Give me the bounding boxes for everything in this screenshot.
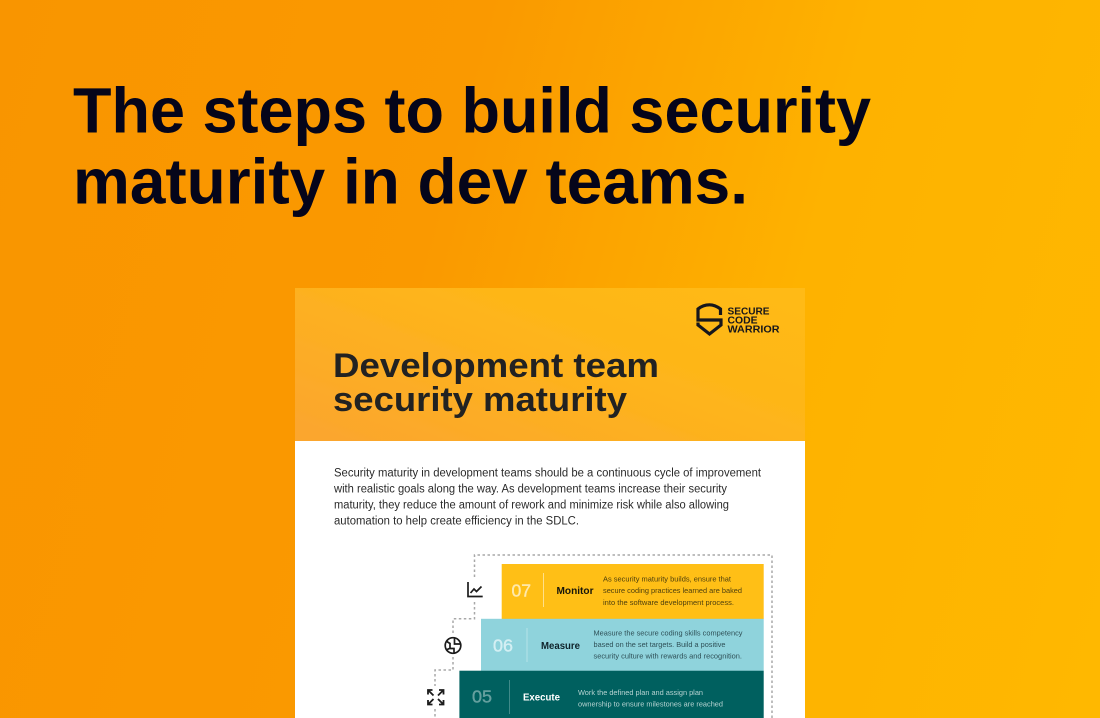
step description Measure xyxy=(594,628,743,660)
step description Execute: ownership to ensure milestones are reached xyxy=(578,700,723,708)
logo: Secure Code Warrior xyxy=(698,305,780,336)
intro paragraph xyxy=(333,468,762,528)
intro paragraph: maturity, they reduce the amount of rework and minimize risk while also allowing xyxy=(334,500,729,512)
step 07: Monitor xyxy=(502,564,764,619)
title: The steps to build security xyxy=(73,74,871,146)
intro paragraph: Security maturity in development teams should be a continuous cycle of improvement xyxy=(334,468,762,480)
step 05: Execute xyxy=(459,671,764,718)
title: maturity in dev teams. xyxy=(73,146,748,218)
step number 07: 07 xyxy=(512,581,531,601)
panel: document preview xyxy=(295,288,805,718)
step name Measure: Measure xyxy=(541,641,580,652)
logo: Secure Code Warrior: SECURE xyxy=(728,306,770,318)
title xyxy=(73,74,871,218)
step name Monitor: Monitor xyxy=(556,586,594,597)
step description Measure: security culture with rewards and recognition. xyxy=(594,652,742,660)
icon: pie chart xyxy=(445,638,461,653)
logo: Secure Code Warrior: CODE xyxy=(728,316,758,326)
step description Monitor: into the software development process. xyxy=(603,598,734,607)
document title: security maturity xyxy=(333,381,627,419)
intro paragraph: automation to help create efficiency in the SDLC. xyxy=(334,516,579,528)
step description Monitor: secure coding practices learned are baked xyxy=(603,586,742,595)
document title: Development team xyxy=(333,347,659,385)
step name Execute: Execute xyxy=(523,693,560,704)
step number 05: 05 xyxy=(472,687,492,707)
step description Measure: Measure the secure coding skills competency xyxy=(594,628,743,638)
icon: line chart xyxy=(468,582,483,596)
step description Execute: Work the defined plan and assign plan xyxy=(578,688,703,697)
document header band xyxy=(295,288,805,441)
dashed staircase path xyxy=(435,555,772,718)
step description Measure: based on the set targets. Build a positive xyxy=(594,640,726,649)
step description Monitor xyxy=(603,575,742,607)
step 06: Measure xyxy=(481,619,764,671)
icon: expand arrows xyxy=(428,690,444,704)
logo: Secure Code Warrior: WARRIOR xyxy=(728,324,780,336)
document title xyxy=(333,347,659,419)
step number 06: 06 xyxy=(493,636,513,656)
intro paragraph: with realistic goals along the way. As development teams increase their security xyxy=(333,484,727,496)
step description Monitor: As security maturity builds, ensure that xyxy=(603,575,732,584)
step description Execute xyxy=(578,688,723,708)
